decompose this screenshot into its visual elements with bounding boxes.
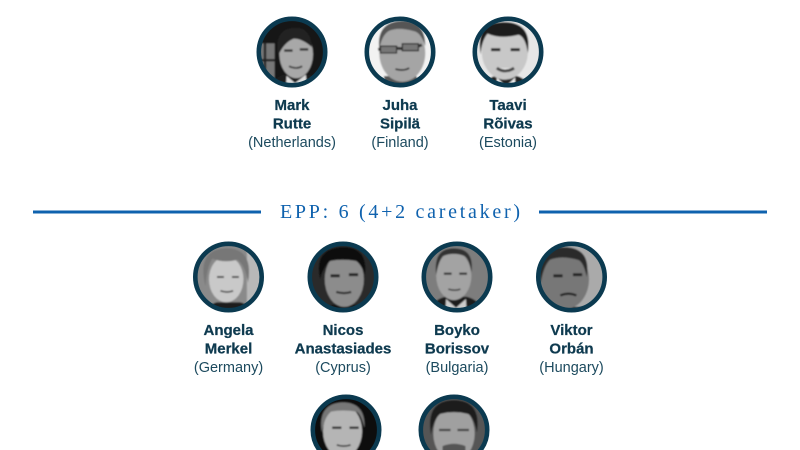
person: Juha Sipilä	[364, 16, 436, 150]
section heading: EPP	[33, 201, 767, 223]
name: Mark	[274, 97, 310, 114]
country: (Finland)	[371, 135, 429, 151]
name: Merkel	[205, 340, 252, 358]
country: (Hungary)	[539, 360, 604, 376]
name: Sipilä	[380, 116, 421, 132]
name: Taavi	[489, 97, 527, 114]
name: Viktor	[550, 322, 593, 339]
person: Nicos Anastasiades	[295, 236, 391, 376]
country: (Bulgaria)	[426, 360, 488, 376]
name: Rõivas	[483, 116, 533, 132]
person: Boyko Borissov	[422, 242, 492, 375]
portrait	[536, 242, 607, 312]
name: Borissov	[425, 340, 490, 358]
person: Viktor Orbán	[536, 242, 607, 375]
portrait	[308, 242, 378, 312]
name: Angela	[203, 322, 254, 339]
name: Juha	[382, 97, 418, 114]
name: Anastasiades	[295, 340, 391, 358]
portrait: Mariano Rajoy	[418, 394, 490, 450]
portrait	[193, 242, 264, 312]
portrait: Enda Kenny	[310, 394, 382, 450]
name: Rutte	[273, 116, 311, 132]
portrait	[364, 16, 436, 88]
person: Angela Merkel	[193, 242, 264, 375]
person: Taavi Rõivas	[472, 16, 544, 150]
name: Nicos	[323, 322, 363, 339]
country: (Cyprus)	[315, 360, 371, 376]
country: (Germany)	[194, 360, 263, 376]
portrait	[422, 242, 492, 312]
person: Mark Rutte	[248, 10, 338, 151]
portrait	[472, 16, 544, 88]
portrait	[256, 16, 328, 88]
country: (Netherlands)	[248, 135, 336, 151]
name: Boyko	[434, 322, 480, 339]
country: (Estonia)	[479, 135, 537, 151]
name: Orbán	[549, 340, 594, 358]
section heading: EPP: EPP: 6 (4+2 caretaker)	[280, 201, 520, 223]
